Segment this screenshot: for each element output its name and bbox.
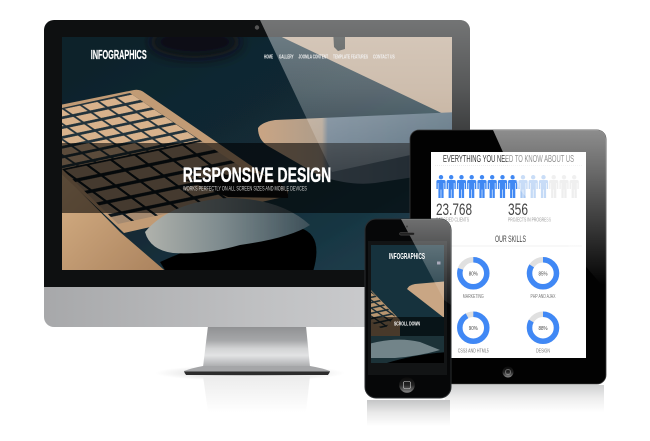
tablet screen xyxy=(431,152,586,358)
stat: projects xyxy=(508,200,551,224)
donut: css3 and html5: CSS3 AND HTML5 xyxy=(458,349,489,355)
donut: design xyxy=(530,314,556,355)
donut: marketing: MARKETING xyxy=(463,294,484,300)
hero band xyxy=(62,143,410,213)
phone body xyxy=(365,219,451,398)
navigation menu: GALLERY xyxy=(279,54,294,60)
monitor bezel xyxy=(44,20,470,287)
donut: php and ajax: 85% xyxy=(538,272,548,278)
stat: clients: 23.768 xyxy=(436,200,472,219)
stat: clients: SATISFIED CLIENTS xyxy=(436,218,469,224)
tablet body xyxy=(410,130,606,384)
phone home button xyxy=(399,377,415,393)
donut: css3 and html5 xyxy=(458,314,489,355)
phone reflection xyxy=(367,400,450,426)
donut: css3 and html5: 90% xyxy=(469,326,478,332)
site logo: INFOGRAPHICS xyxy=(91,47,147,62)
monitor glare xyxy=(260,20,470,172)
people icon row xyxy=(436,175,579,198)
monitor stand xyxy=(184,326,330,375)
monitor silver chin xyxy=(44,280,470,327)
hero subheading: WORKS PERFECTLY ON ALL SCREEN SIZES AND MOBILE DEVICES xyxy=(183,186,307,192)
donut: design: 88% xyxy=(538,326,548,332)
desktop monitor xyxy=(44,20,470,327)
donut: design: DESIGN xyxy=(536,349,550,355)
stat: projects: PROJECTS IN PROGRESS xyxy=(508,218,551,224)
tablet xyxy=(410,130,606,384)
navigation menu: TEMPLATE FEATURES xyxy=(333,54,368,60)
phone menu icon xyxy=(437,262,440,264)
donut: php and ajax xyxy=(530,260,556,300)
navigation menu: JOOMLA CONTENT xyxy=(298,54,328,60)
stand shadow and reflection xyxy=(155,365,345,412)
tablet home button xyxy=(502,366,514,378)
navigation menu xyxy=(264,54,395,60)
stat: projects: 356 xyxy=(508,200,528,219)
navigation menu: CONTACT US xyxy=(373,54,395,60)
skills heading: OUR SKILLS xyxy=(495,234,526,245)
monitor camera xyxy=(255,25,259,30)
tablet glare xyxy=(493,130,606,290)
phone band xyxy=(371,317,444,336)
tablet reflection xyxy=(445,385,604,412)
donut: php and ajax: PHP AND AJAX xyxy=(530,294,556,300)
phone screen xyxy=(371,245,444,363)
desktop screen photo xyxy=(55,26,460,275)
hero heading: RESPONSIVE DESIGN xyxy=(183,164,331,187)
phone button text: SCROLL DOWN xyxy=(394,322,420,328)
donut: marketing: 80% xyxy=(469,272,478,278)
stat: clients xyxy=(436,200,472,224)
phone glare xyxy=(401,219,451,305)
navigation menu: HOME xyxy=(264,54,273,60)
phone inner frame xyxy=(368,241,447,375)
phone speaker xyxy=(400,226,414,235)
donut: marketing xyxy=(460,260,487,300)
phone xyxy=(365,219,451,398)
phone logo: INFOGRAPHICS xyxy=(389,251,425,261)
